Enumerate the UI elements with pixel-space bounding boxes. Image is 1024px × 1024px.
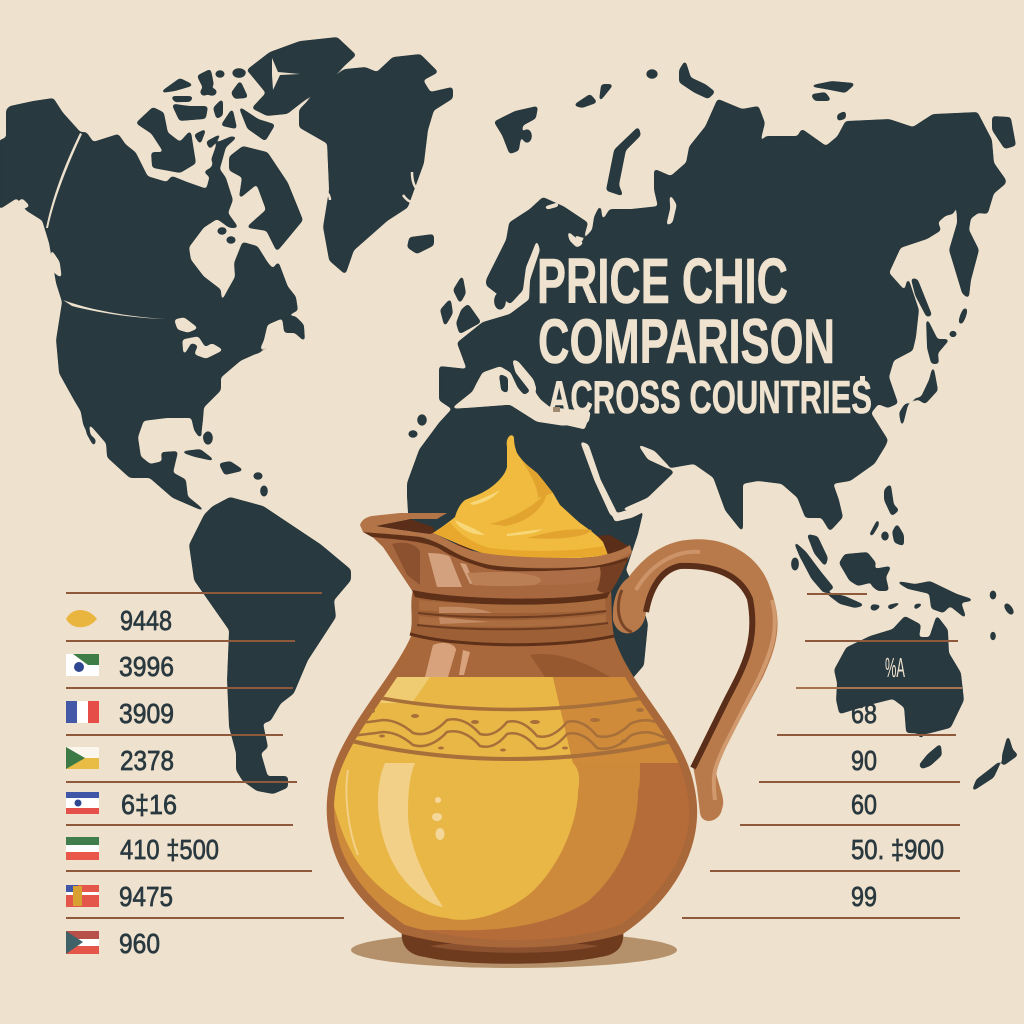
value row 7: 99 xyxy=(851,881,877,912)
row 8: 960 xyxy=(119,928,160,959)
row 4 xyxy=(66,745,297,782)
row 5 xyxy=(66,789,293,825)
jug foot xyxy=(402,930,623,964)
right price table xyxy=(682,594,962,918)
row 7 xyxy=(66,881,344,918)
row 6 xyxy=(66,834,312,871)
left price table xyxy=(66,593,344,959)
map: eurasia xyxy=(440,100,1005,530)
body: band dots xyxy=(369,708,644,752)
value row 5: 60 xyxy=(851,789,877,820)
map: south america xyxy=(190,498,350,793)
body: bright yellow zone xyxy=(329,763,579,920)
title line 2: COMPARISON xyxy=(538,307,835,377)
body: clipped glaze zones xyxy=(334,642,689,940)
map: arctic, european and asian islands xyxy=(441,62,1015,425)
row 5: 6‡16 xyxy=(121,789,177,820)
row 3: 3909 xyxy=(119,698,174,729)
world map xyxy=(0,38,1017,793)
title line 3: ACROSS COUNTRIES xyxy=(548,371,872,423)
row 2: 3996 xyxy=(119,651,174,682)
body: gloss dots xyxy=(432,797,444,840)
row 4: 2378 xyxy=(120,745,174,776)
title line 1: PRICE CHIC xyxy=(537,245,788,317)
map: lakes and seas xyxy=(11,195,676,521)
value row 6: 50. ‡900 xyxy=(851,834,944,865)
map: land masses xyxy=(0,38,1005,793)
row 2 xyxy=(66,651,293,688)
body: upper brown shadow xyxy=(398,640,625,677)
map: southeast asia and oceania xyxy=(792,485,1017,790)
row 7: 9475 xyxy=(119,881,173,912)
value row 3: 68 xyxy=(851,698,877,729)
value row 4: 90 xyxy=(851,745,877,776)
map: north america xyxy=(0,38,355,510)
body: glazed band xyxy=(330,677,573,763)
title xyxy=(537,245,872,423)
jug neck xyxy=(410,590,614,645)
body: left highlight xyxy=(378,763,443,907)
row 1 xyxy=(66,593,322,641)
jug mouth interior xyxy=(375,519,632,565)
jug handle xyxy=(613,539,778,821)
jug body xyxy=(320,630,710,950)
right price table: %A xyxy=(885,652,905,683)
jug collar and spout xyxy=(360,513,632,605)
jug shadow xyxy=(351,932,677,968)
body: right shaded zone xyxy=(426,763,689,940)
right divider lines xyxy=(682,594,962,918)
illustration: clay jug with mustard xyxy=(320,435,778,968)
row 3 xyxy=(66,698,283,735)
map: thin cream borders xyxy=(46,58,418,319)
map: africa xyxy=(408,403,647,680)
body: orange zone xyxy=(330,763,640,930)
row 8 xyxy=(66,928,160,959)
map: greenland and iceland xyxy=(300,55,452,273)
row 6: 410 ‡500 xyxy=(120,834,219,865)
body: decorative band lines xyxy=(347,697,682,759)
row 1: 9448 xyxy=(120,605,172,636)
mustard swirl xyxy=(433,435,608,558)
